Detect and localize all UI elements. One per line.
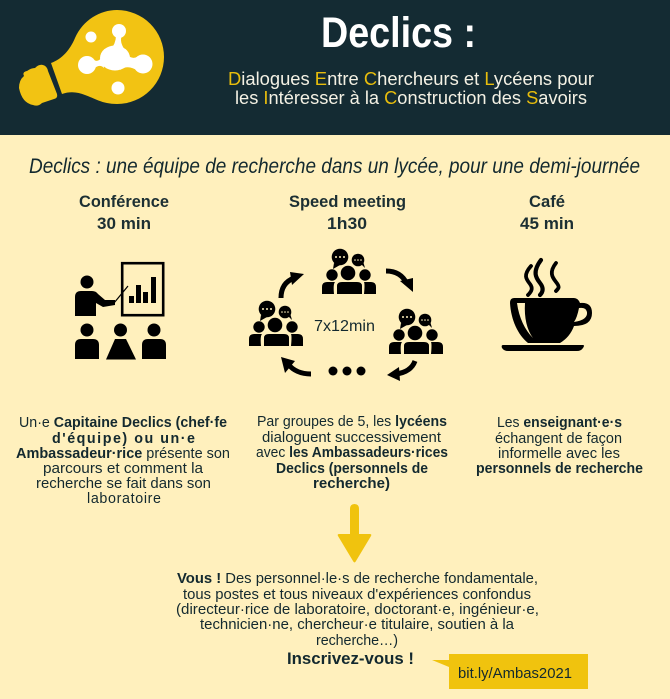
- text: conférence description: [16, 415, 230, 507]
- arrow: top left: [281, 272, 304, 298]
- text: café description: échangent de façon: [495, 431, 622, 447]
- text: conférence description: d'équipe) ou un·e: [52, 431, 195, 447]
- text: who can join: [176, 571, 539, 649]
- icon: group right: [389, 309, 443, 354]
- call to action: Inscrivez-vous !: [287, 649, 414, 668]
- text: speed meeting description: recherche): [313, 476, 390, 492]
- ellipsis dots: [328, 366, 366, 376]
- icon: light bulb with molecule: [19, 10, 164, 106]
- text: who can join: recherche…): [316, 633, 398, 649]
- arrow: bottom left: [281, 357, 311, 374]
- heading: conférence: 30 min: [97, 214, 151, 233]
- header band: [0, 0, 670, 135]
- text: café description: [476, 415, 643, 477]
- icon: presenter and audience: [75, 263, 166, 360]
- diagram: rotation cycle: [249, 249, 443, 381]
- heading: café: 45 min: [520, 214, 574, 233]
- title: Declics :: [321, 9, 476, 57]
- label: duration: 7x12min: [314, 318, 375, 335]
- subtitle: les Intéresser à la Construction des Savoirs: [235, 88, 587, 108]
- text: conférence description: laboratoire: [87, 491, 161, 507]
- icon: group left: [249, 301, 303, 346]
- arrow: bottom right: [387, 361, 415, 381]
- text: conférence description: parcours et comment la: [43, 461, 203, 477]
- text: conférence description: recherche se fait dans son: [36, 476, 211, 492]
- callout: link: bit.ly/Ambas2021: [458, 665, 572, 682]
- heading: speed meeting: [289, 192, 406, 233]
- text: speed meeting description: [256, 414, 448, 492]
- text: who can join: tous postes et tous niveaux d'expériences confondus: [183, 587, 531, 603]
- icon: group top: [322, 249, 376, 294]
- heading: conférence: [79, 192, 169, 233]
- text: speed meeting description: Declics (personnels de: [276, 461, 428, 477]
- heading: speed meeting: Speed meeting: [289, 192, 406, 211]
- text: conférence description: Ambassadeur·rice présente son: [16, 446, 230, 462]
- heading: speed meeting: 1h30: [327, 214, 367, 233]
- text: who can join: technicien·ne, chercheur·e titulaire, soutien à la: [200, 617, 514, 633]
- text: speed meeting description: avec les Ambassadeurs·rices: [256, 445, 448, 461]
- text: who can join: (directeur·rice de laboratoire, doctorant·e, ingénieur·e,: [176, 602, 539, 618]
- text: conférence description: Un·e Capitaine Declics (chef·fe: [19, 415, 227, 431]
- panel: conférence: [16, 192, 230, 507]
- heading: café: [520, 192, 574, 233]
- subtitle: Dialogues Entre Chercheurs et Lycéens pour: [228, 69, 594, 89]
- subtitle: [228, 69, 594, 108]
- text: who can join: Vous ! Des personnel·le·s de recherche fondamentale,: [177, 571, 538, 587]
- panel: café: [476, 192, 643, 477]
- icon: coffee cup: [502, 260, 592, 351]
- heading: conférence: Conférence: [79, 192, 169, 211]
- arrow: down to call to action: [338, 504, 371, 562]
- text: café description: personnels de recherche: [476, 461, 643, 477]
- text: café description: Les enseignant·e·s: [497, 415, 622, 431]
- text: speed meeting description: Par groupes de 5, les lycéens: [257, 414, 447, 430]
- callout: link: [432, 654, 588, 689]
- panel: speed meeting: [249, 192, 448, 492]
- text: speed meeting description: dialoguent successivement: [262, 430, 441, 446]
- heading: café: Café: [529, 192, 565, 211]
- text: café description: informelle avec les: [498, 446, 620, 462]
- arrow: top right: [386, 271, 413, 292]
